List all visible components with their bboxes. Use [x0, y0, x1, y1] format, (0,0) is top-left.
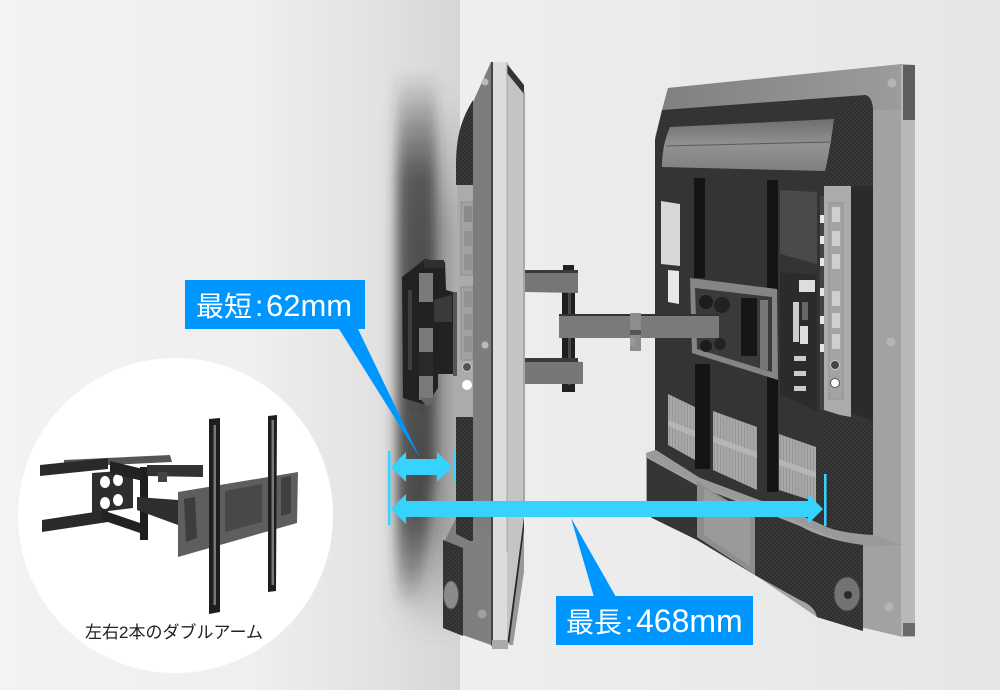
lower bezel	[646, 450, 903, 547]
wall tabs	[64, 455, 172, 467]
VESA plate	[178, 472, 298, 557]
foot knob	[444, 581, 458, 609]
lower mesh base	[647, 458, 863, 631]
white circle with product photo	[18, 358, 333, 673]
callout: 最長: 最長	[566, 607, 622, 638]
outer frame	[646, 64, 915, 637]
top vent	[662, 119, 834, 171]
side edge strip	[901, 65, 915, 637]
callout: 最短: :	[255, 290, 263, 323]
mounting plate	[690, 278, 778, 380]
folding arms	[110, 461, 147, 482]
callout: 最短: 最短	[196, 291, 252, 322]
connector panels	[780, 190, 817, 411]
arrow: short span	[388, 451, 456, 525]
recessed bay	[697, 482, 755, 575]
background: room corner walls	[0, 0, 460, 690]
dark recess	[851, 186, 873, 421]
callout: 最長	[556, 596, 753, 645]
wall mount bracket	[402, 259, 457, 406]
VESA rails	[694, 178, 778, 492]
arrow: long span	[391, 474, 826, 526]
grill vents	[668, 394, 816, 502]
rubber foot	[834, 577, 860, 611]
upper mesh back of side view	[456, 100, 474, 185]
dimension: longest 468mm	[391, 474, 826, 645]
front edge strips	[491, 62, 493, 648]
swing arm upper and lower links	[525, 265, 583, 392]
lower mesh and foot	[456, 417, 474, 540]
callout: 最長: :	[625, 606, 633, 639]
callout pointer	[571, 518, 616, 597]
mesh back	[655, 95, 873, 535]
TV back view	[646, 64, 915, 637]
callout: 最長: 468mm	[636, 603, 743, 639]
side body	[473, 62, 491, 645]
callout pointer	[339, 329, 420, 458]
screws	[884, 78, 896, 612]
dimension: shortest 62mm	[185, 280, 456, 525]
TV side view	[443, 62, 525, 649]
swing arm middle link	[559, 313, 719, 351]
callout: 最短	[185, 280, 365, 329]
wall plate	[92, 470, 133, 513]
side port column	[820, 186, 851, 417]
caption: 左右2本のダブルアーム	[85, 622, 263, 642]
side port panel	[457, 185, 474, 417]
vertical rails	[209, 418, 220, 614]
stickers	[661, 201, 680, 304]
callout: 最短: 62mm	[266, 288, 352, 323]
top bezel	[662, 64, 902, 110]
product: double arm mount	[40, 415, 298, 614]
